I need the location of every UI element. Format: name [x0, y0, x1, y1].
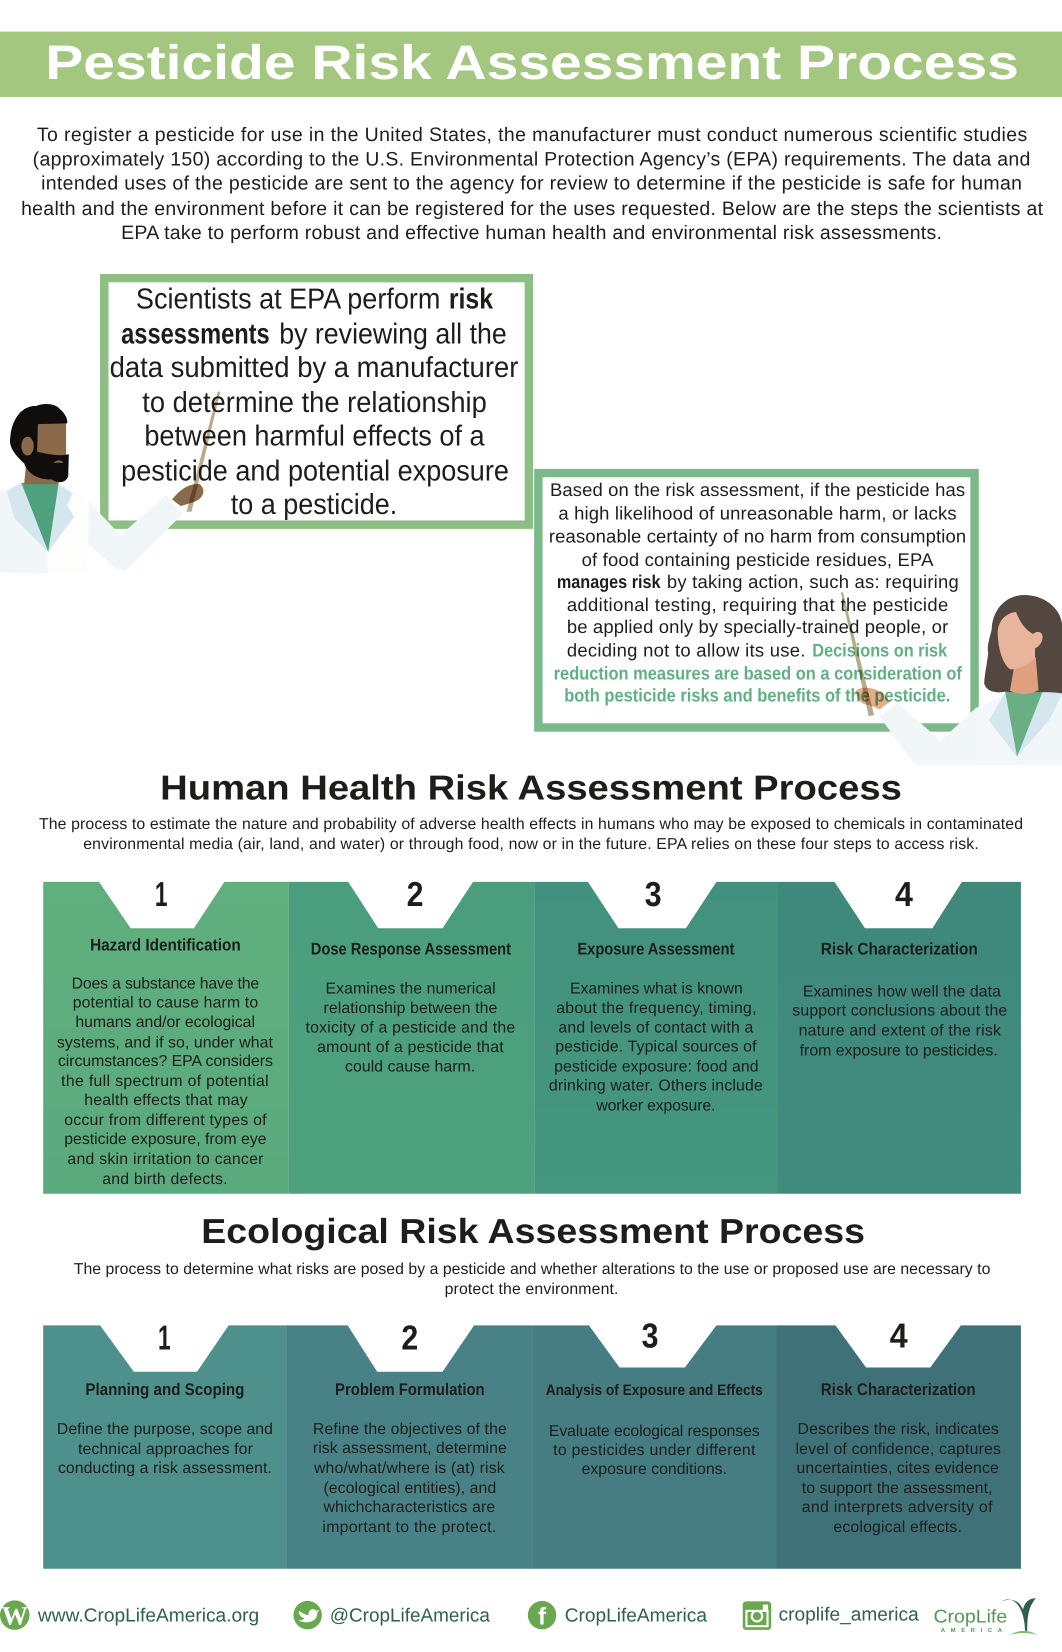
- panel: hazard identification: pesticide exposure, from eye: [64, 1130, 267, 1148]
- panel: risk characterization (ecological): [776, 1316, 1021, 1569]
- panel: exposure assessment: [534, 874, 778, 1194]
- human health description: environmental media (air, land, and water) or through food, now or in the future. EPA relies on these four steps to access risk.: [83, 835, 979, 853]
- title banner: Pesticide Risk Assessment Process: [45, 35, 1019, 90]
- panel: hazard identification: Hazard Identification: [90, 937, 241, 955]
- panel: risk characterization: Examines how well the data: [803, 983, 1002, 1001]
- facebook link: [528, 1601, 708, 1630]
- callout: risk assessments: to a pesticide.: [231, 488, 397, 520]
- panel: planning and scoping: [43, 1318, 287, 1569]
- panel: dose response assessment: [289, 874, 534, 1194]
- panel: planning and scoping: technical approaches for: [78, 1440, 253, 1458]
- panel: hazard identification: potential to cause harm to: [73, 994, 258, 1012]
- panel: risk characterization (ecological): 4: [890, 1316, 908, 1355]
- panel: hazard identification: 1: [155, 874, 168, 913]
- intro paragraph: intended uses of the pesticide are sent to the agency for review to determine if the pesticide is safe for human: [41, 172, 1022, 194]
- panel: analysis of exposure and effects: to pesticides under different: [553, 1441, 756, 1459]
- panel: risk characterization: nature and extent of the risk: [799, 1022, 1001, 1040]
- callout: managing risk: a high likelihood of unreasonable harm, or lacks: [558, 503, 957, 524]
- callout: risk assessments: to determine the relationship: [142, 386, 487, 418]
- website link: W: [2, 1602, 28, 1631]
- panel: exposure assessment: about the frequency, timing,: [556, 999, 756, 1017]
- twitter link: @CropLifeAmerica: [330, 1605, 491, 1626]
- callout: managing risk: of food containing pesticide residues, EPA: [582, 549, 934, 570]
- callout: risk assessments: risk: [449, 282, 494, 315]
- instagram link: [743, 1601, 920, 1630]
- title banner: [0, 32, 1062, 97]
- panel: problem formulation: Refine the objectives of the: [313, 1420, 507, 1438]
- ecological description: protect the environment.: [445, 1280, 618, 1298]
- callout: risk assessments: Scientists at EPA perform: [136, 282, 440, 315]
- intro paragraph: To register a pesticide for use in the United States, the manufacturer must conduct numerous scientific studies: [37, 123, 1027, 145]
- callout: managing risk: manages risk: [557, 571, 661, 592]
- panel: hazard identification: health effects that may: [84, 1092, 248, 1109]
- panel: analysis of exposure and effects: [532, 1316, 776, 1569]
- panel: exposure assessment: and levels of contact with a: [558, 1019, 754, 1037]
- panel: hazard identification: the full spectrum of potential: [61, 1073, 269, 1090]
- panel: exposure assessment: Examines what is known: [570, 980, 743, 998]
- panel: exposure assessment: drinking water. Others include: [549, 1077, 763, 1095]
- panel: hazard identification: circumstances? EPA considers: [58, 1053, 273, 1070]
- callout: managing risk: [538, 473, 975, 727]
- callout: managing risk: both pesticide risks and benefits of the pesticide.: [564, 685, 950, 706]
- panel: risk characterization (ecological): ecological effects.: [833, 1518, 962, 1536]
- panel: analysis of exposure and effects: Evaluate ecological responses: [549, 1422, 760, 1440]
- ecological description: The process to determine what risks are posed by a pesticide and whether alterations to the use or proposed use are necessary to: [74, 1260, 990, 1278]
- panel: hazard identification: and skin irritation to cancer: [67, 1150, 263, 1168]
- panel: analysis of exposure and effects: 3: [642, 1316, 658, 1355]
- panel: exposure assessment: pesticide exposure: food and: [554, 1058, 759, 1076]
- heading: ecological: Ecological Risk Assessment Process: [201, 1212, 865, 1251]
- icon: CropLife America logo: CropLife: [933, 1606, 1007, 1627]
- heading: human health: Human Health Risk Assessment Process: [160, 768, 902, 807]
- panel: hazard identification: [43, 874, 289, 1194]
- panel: risk characterization: [778, 874, 1021, 1194]
- panel: risk characterization (ecological): Describes the risk, indicates: [798, 1420, 999, 1438]
- panel: dose response assessment: 2: [407, 874, 424, 913]
- panel: problem formulation: 2: [401, 1318, 418, 1357]
- panel: problem formulation: (ecological entities), and: [323, 1479, 496, 1497]
- callout: risk assessments: pesticide and potential exposure: [121, 454, 509, 487]
- panel: dose response assessment: Dose Response Assessment: [311, 941, 512, 959]
- panel: dose response assessment: toxicity of a pesticide and the: [306, 1019, 515, 1037]
- panel: problem formulation: important to the protect.: [322, 1518, 496, 1536]
- callout: risk assessments: by reviewing all the: [279, 317, 507, 350]
- panel: risk characterization (ecological): Risk Characterization: [821, 1381, 976, 1399]
- callout: managing risk: Based on the risk assessment, if the pesticide has: [550, 479, 965, 500]
- icon: male scientist with pointer: [0, 392, 220, 573]
- panel: problem formulation: Problem Formulation: [335, 1381, 485, 1399]
- facebook link: f: [538, 1602, 546, 1630]
- callout: risk assessments: data submitted by a manufacturer: [110, 351, 518, 384]
- panel: problem formulation: [287, 1318, 532, 1569]
- human health description: [39, 815, 1023, 853]
- callout: managing risk: reasonable certainty of no harm from consumption: [549, 526, 966, 547]
- panel: risk characterization: support conclusions about the: [792, 1002, 1007, 1020]
- panel: risk characterization: Risk Characterization: [821, 941, 978, 959]
- panel: risk characterization (ecological): level of confidence, captures: [795, 1440, 1001, 1458]
- instagram link: croplife_america: [779, 1604, 920, 1625]
- panel: planning and scoping: conducting a risk assessment.: [58, 1459, 272, 1477]
- panel: hazard identification: occur from different types of: [64, 1112, 267, 1129]
- panel: planning and scoping: Define the purpose, scope and: [57, 1420, 273, 1438]
- panel: exposure assessment: pesticide. Typical sources of: [555, 1038, 757, 1056]
- callout: managing risk: reduction measures are based on a consideration of: [554, 663, 962, 684]
- intro paragraph: health and the environment before it can be registered for the uses requested. Below are the steps the scientists at: [21, 197, 1043, 219]
- panel: planning and scoping: Planning and Scoping: [85, 1381, 244, 1399]
- intro paragraph: (approximately 150) according to the U.S. Environmental Protection Agency’s (EPA) requirements. The data and: [33, 148, 1030, 170]
- website link: [0, 1600, 259, 1631]
- panel: dose response assessment: amount of a pesticide that: [317, 1038, 504, 1056]
- panel: problem formulation: who/what/where is (at) risk: [313, 1459, 505, 1477]
- panel: exposure assessment: worker exposure.: [595, 1097, 715, 1115]
- website link: www.CropLifeAmerica.org: [37, 1605, 259, 1626]
- callout: managing risk: be applied only by specially-trained people, or: [567, 616, 948, 637]
- panel: hazard identification: and birth defects.: [102, 1171, 228, 1188]
- footer: [0, 1598, 1038, 1635]
- intro paragraph: EPA take to perform robust and effective human health and environmental risk assessments.: [121, 221, 942, 243]
- panel: exposure assessment: 3: [645, 874, 662, 913]
- panel: hazard identification: humans and/or ecological: [75, 1014, 255, 1031]
- callout: risk assessments: [104, 278, 529, 525]
- panel: analysis of exposure and effects: exposure conditions.: [582, 1460, 727, 1478]
- panel: problem formulation: whichcharacteristics are: [322, 1498, 495, 1516]
- panel: problem formulation: risk assessment, determine: [313, 1439, 507, 1457]
- panel: risk characterization (ecological): and interprets adversity of: [802, 1498, 993, 1516]
- human health description: The process to estimate the nature and probability of adverse health effects in humans who may be exposed to chemicals in contaminated: [39, 815, 1023, 833]
- facebook link: CropLifeAmerica: [565, 1605, 708, 1626]
- icon: CropLife America logo: [933, 1598, 1038, 1635]
- callout: managing risk: deciding not to allow its use.: [567, 640, 805, 661]
- callout: risk assessments: assessments: [121, 317, 270, 350]
- panel: dose response assessment: Examines the numerical: [326, 980, 496, 998]
- panel: hazard identification: Does a substance have the: [72, 975, 259, 992]
- icon: female scientist with pointer: [841, 592, 1062, 765]
- callout: risk assessments: between harmful effects of a: [144, 419, 485, 452]
- panel: analysis of exposure and effects: Analysis of Exposure and Effects: [546, 1382, 763, 1399]
- panel: dose response assessment: relationship between the: [323, 999, 497, 1017]
- panel: dose response assessment: could cause harm.: [345, 1058, 475, 1076]
- panel: exposure assessment: Exposure Assessment: [577, 941, 735, 959]
- callout: managing risk: additional testing, requiring that the pesticide: [567, 594, 948, 615]
- panel: risk characterization: 4: [895, 874, 914, 913]
- intro paragraph: [21, 123, 1043, 243]
- panel: risk characterization (ecological): to support the assessment,: [802, 1479, 992, 1497]
- ecological description: [74, 1260, 990, 1298]
- twitter link: [293, 1601, 491, 1629]
- callout: managing risk: by taking action, such as: requiring: [667, 571, 959, 592]
- panel: risk characterization: from exposure to pesticides.: [800, 1042, 998, 1060]
- panel: hazard identification: systems, and if so, under what: [57, 1034, 274, 1051]
- panel: planning and scoping: 1: [158, 1318, 171, 1357]
- icon: CropLife America logo: AMERICA: [941, 1628, 1002, 1634]
- panel: risk characterization (ecological): uncertainties, cites evidence: [796, 1459, 999, 1477]
- callout: managing risk: Decisions on risk: [812, 640, 947, 661]
